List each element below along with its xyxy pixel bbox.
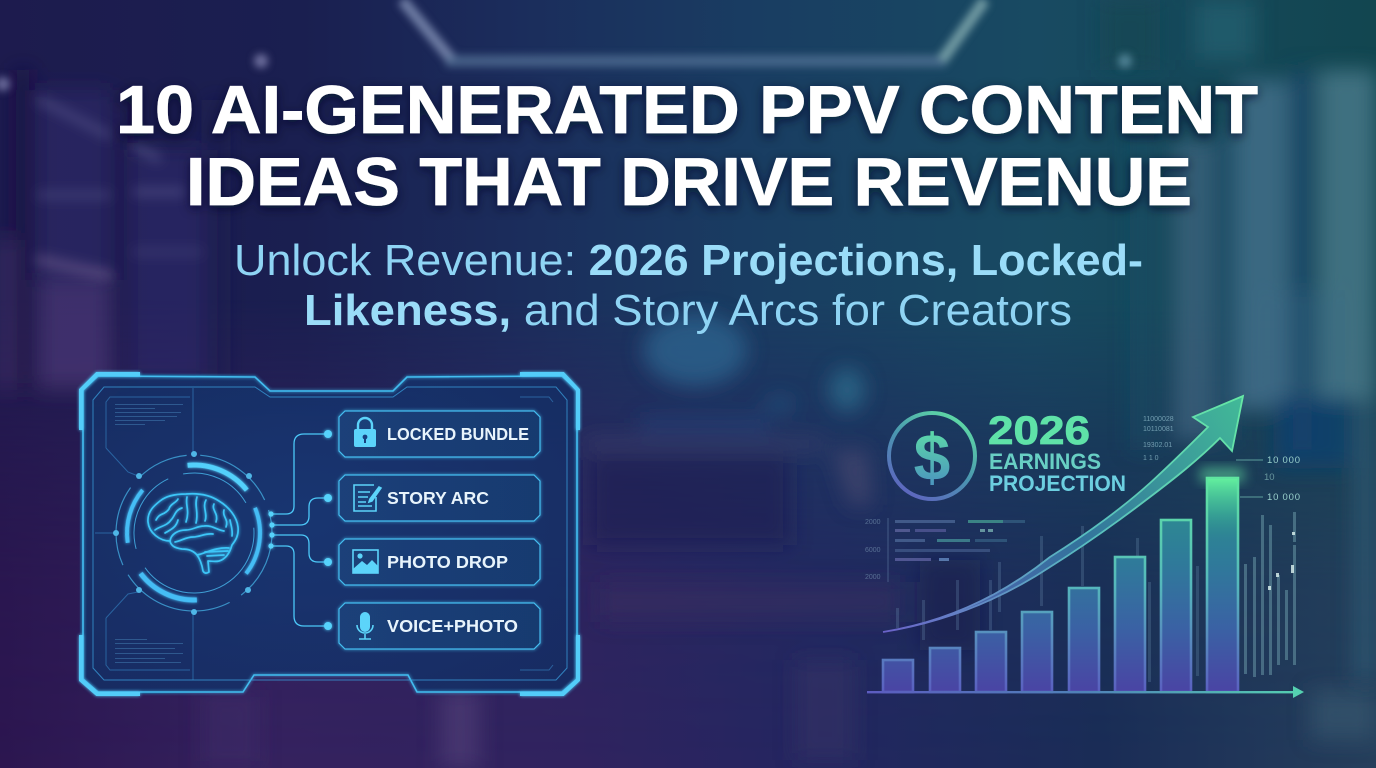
value labels: 10 000 bbox=[1267, 455, 1300, 466]
value labels bbox=[1236, 455, 1300, 503]
ceiling lights bbox=[0, 0, 1132, 91]
label: locked bundle: LOCKED BUNDLE bbox=[387, 424, 529, 444]
right windows bbox=[1100, 0, 1376, 680]
chart: 2026 earnings projection bbox=[865, 396, 1304, 698]
label: 2026: 2026 bbox=[988, 409, 1090, 453]
data readouts: 10110081 bbox=[1143, 426, 1174, 433]
axis tick labels: 6000 bbox=[865, 547, 881, 554]
icon: dollar ring: $ bbox=[914, 420, 950, 494]
label: photo drop: PHOTO DROP bbox=[387, 552, 508, 572]
icon: brain bbox=[148, 494, 238, 573]
tallest bar bbox=[1200, 468, 1244, 692]
title line 2: IDEAS THAT DRIVE REVENUE bbox=[186, 144, 1192, 220]
left office columns bbox=[0, 70, 224, 390]
button: voice+photo bbox=[339, 603, 540, 649]
icon: microphone bbox=[357, 612, 373, 639]
data readouts: 1 1 0 bbox=[1143, 455, 1159, 462]
label: voice+photo: VOICE+PHOTO bbox=[387, 616, 518, 636]
value labels: 10 bbox=[1264, 472, 1275, 483]
axis tick labels: 2000 bbox=[865, 574, 881, 581]
subtitle line 2: Likeness, and Story Arcs for Creators bbox=[304, 286, 1072, 335]
label: projection: PROJECTION bbox=[989, 471, 1126, 496]
panel: AI content hub bbox=[80, 373, 579, 695]
label: earnings: EARNINGS bbox=[989, 449, 1101, 474]
panel frame bbox=[80, 373, 579, 695]
axis tick labels: 2000 bbox=[865, 519, 881, 526]
circular HUD ring bbox=[108, 447, 280, 619]
icon: document with pen bbox=[354, 485, 381, 511]
connector lines bbox=[268, 430, 332, 630]
subtitle bbox=[234, 236, 1143, 335]
button: locked bundle bbox=[339, 411, 540, 457]
background data marks bbox=[865, 416, 1296, 682]
title line 1: 10 AI-GENERATED PPV CONTENT bbox=[116, 72, 1258, 148]
title bbox=[116, 72, 1258, 220]
icon: image bbox=[353, 550, 378, 573]
button: story arc bbox=[339, 475, 540, 521]
subtitle line 1: Unlock Revenue: 2026 Projections, Locked- bbox=[234, 236, 1143, 285]
label: story arc: STORY ARC bbox=[387, 488, 489, 508]
centre lamp and desk shapes bbox=[200, 314, 1376, 768]
x axis arrow bbox=[867, 686, 1304, 698]
icon: dollar ring bbox=[889, 413, 975, 499]
icon: lock bbox=[354, 418, 376, 447]
growth arrow bbox=[883, 396, 1243, 632]
button: photo drop bbox=[339, 539, 540, 585]
data readouts bbox=[1143, 416, 1174, 462]
axis tick labels bbox=[865, 519, 881, 581]
bars bbox=[883, 520, 1191, 692]
value labels: 10 000 bbox=[1267, 492, 1300, 503]
data readouts: 11000028 bbox=[1143, 416, 1174, 423]
data readouts: 19302.01 bbox=[1143, 442, 1172, 449]
